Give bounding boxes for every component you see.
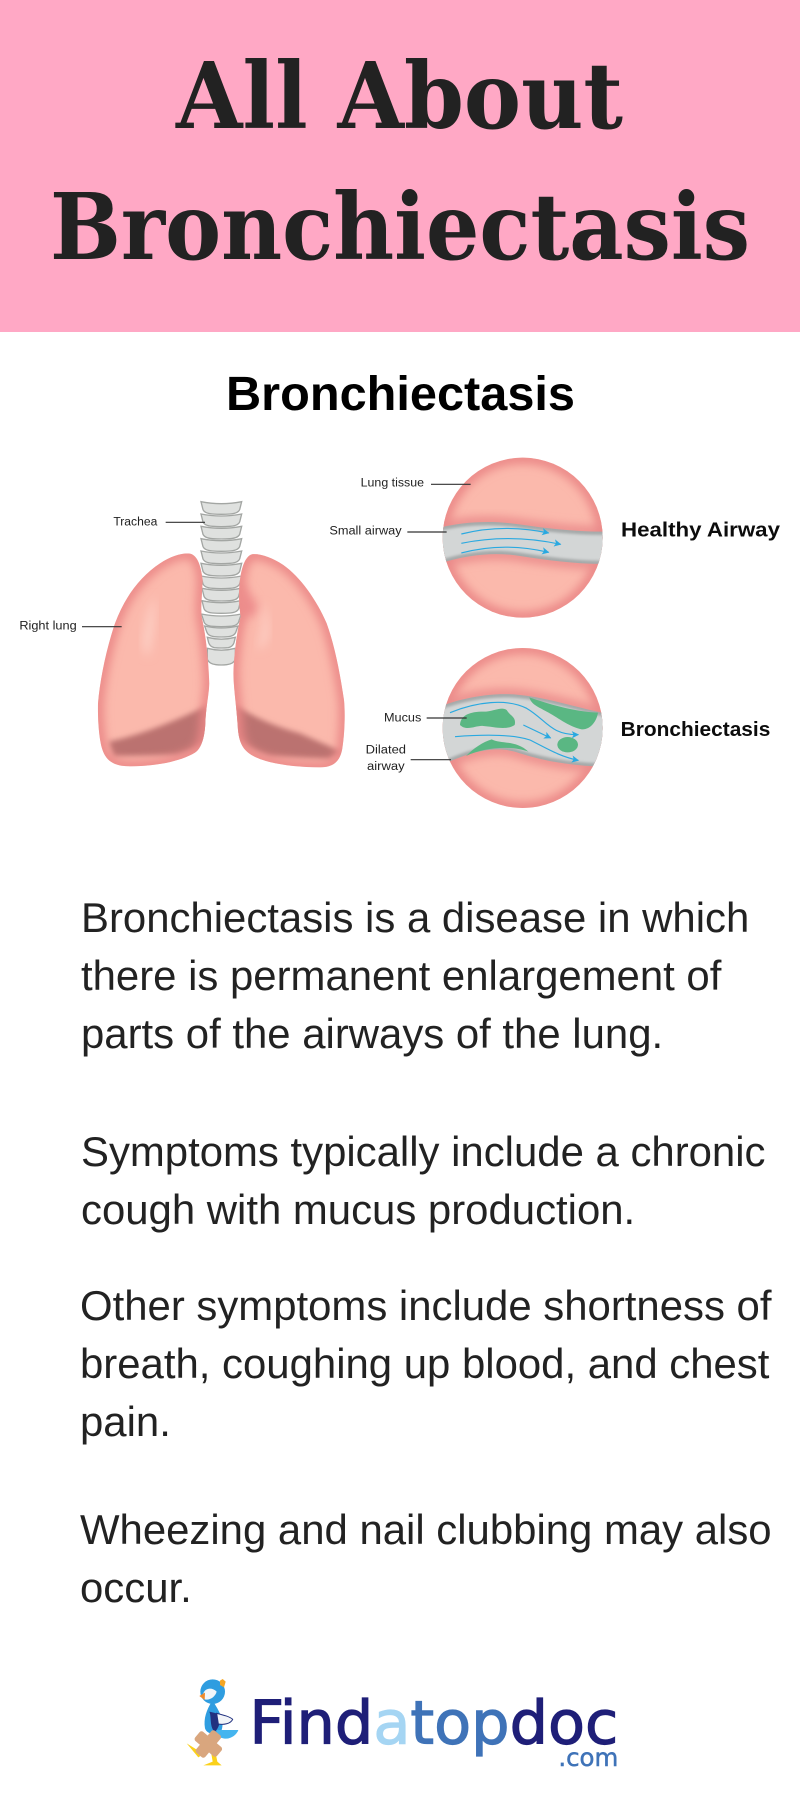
title banner [0, 0, 800, 332]
airflow arrows [461, 528, 561, 553]
paragraph: symptoms: Symptoms typically include a chronic [81, 1128, 766, 1175]
left lung [233, 554, 345, 768]
label: Healthy Airway: Healthy Airway [621, 519, 781, 542]
paragraph: other symptoms [80, 1282, 772, 1445]
label: Mucus [384, 711, 467, 725]
label: Trachea [113, 514, 205, 528]
label: Mucus: Mucus [384, 711, 421, 725]
airway diagrams [329, 457, 781, 810]
paragraph: wheezing [80, 1506, 772, 1611]
paragraph: definition [81, 894, 749, 1057]
paragraph: wheezing: Wheezing and nail clubbing may also [80, 1506, 772, 1553]
logo [187, 1679, 618, 1772]
label: Trachea: Trachea [113, 514, 157, 528]
label: Dilated airway: Dilated [366, 743, 406, 757]
wordmark: Findatopdoc [249, 1688, 618, 1757]
paragraph: other symptoms: Other symptoms include shortness of [80, 1282, 772, 1329]
icon: bird mascot [187, 1679, 238, 1765]
label: Lung tissue [361, 476, 471, 490]
label: Small airway [329, 524, 447, 538]
paragraph: other symptoms: breath, coughing up blood, and chest [80, 1340, 770, 1387]
wordmark suffix: .com [558, 1743, 618, 1772]
title line 2: Bronchiectasis [50, 173, 750, 281]
bronchiectasis circle [437, 647, 607, 810]
label: Dilated airway [366, 743, 451, 773]
title line 1: All About [175, 42, 623, 150]
right lung [98, 553, 210, 766]
paragraph: symptoms: cough with mucus production. [81, 1186, 635, 1233]
label: Small airway: Small airway [329, 524, 403, 538]
healthy airway circle [437, 457, 607, 620]
paragraph: other symptoms: pain. [80, 1398, 171, 1445]
airflow arrows [450, 702, 578, 760]
label: Right lung: Right lung [19, 618, 77, 632]
paragraph: wheezing: occur. [80, 1564, 192, 1611]
lungs diagram [19, 502, 350, 773]
label: Right lung [19, 618, 122, 632]
label: Bronchiectasis: Bronchiectasis [621, 718, 770, 741]
paragraph: definition: Bronchiectasis is a disease in which [81, 894, 749, 941]
diagram heading: Bronchiectasis [226, 368, 575, 421]
label: Lung tissue: Lung tissue [361, 476, 424, 490]
paragraph: definition: there is permanent enlargement of [81, 952, 722, 999]
mucus blobs [460, 697, 598, 756]
label: Dilated airway: airway [367, 759, 406, 773]
paragraph: symptoms [81, 1128, 766, 1233]
trachea [201, 502, 242, 665]
paragraph: definition: parts of the airways of the lung. [81, 1010, 663, 1057]
